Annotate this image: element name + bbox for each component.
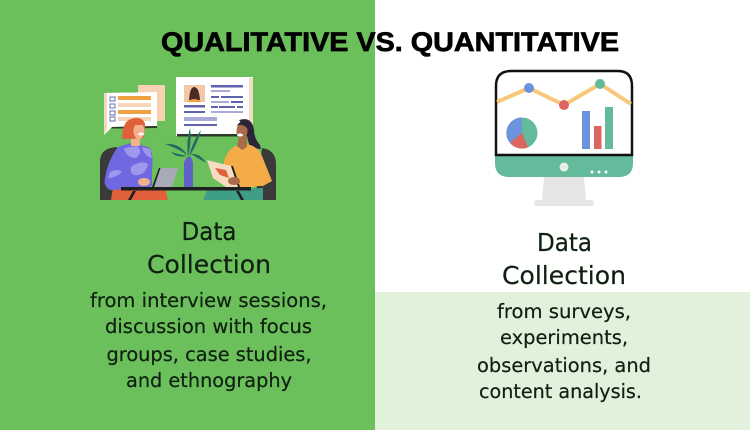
text block: quantitative description: experiments, — [500, 326, 628, 349]
icon: left woman — [105, 118, 168, 200]
icon: profile document — [176, 77, 253, 136]
heading: qualitative data collection — [147, 217, 271, 279]
heading: quantitative data collection — [502, 228, 626, 290]
heading: quantitative data collection: Data — [537, 228, 592, 257]
icon: table — [121, 187, 251, 200]
illustration: computer monitor with charts — [495, 71, 633, 206]
text block: quantitative description: observations, and — [477, 354, 651, 377]
icon: right chair — [255, 148, 276, 200]
icon: checklist speech bubble — [104, 85, 165, 135]
icon: left chair — [100, 147, 122, 200]
text block: qualitative description: from interview sessions, — [90, 289, 327, 312]
heading: qualitative data collection: Data — [182, 217, 236, 246]
icon: laptop — [152, 168, 178, 187]
icon: monitor stand — [534, 177, 594, 206]
panel: qualitative background — [0, 0, 375, 430]
text block: quantitative description — [477, 300, 651, 403]
text block: qualitative description: and ethnography — [126, 369, 292, 392]
text block: qualitative description: groups, case studies, — [106, 343, 312, 366]
illustration: two women in an interview — [100, 77, 276, 200]
heading: qualitative data collection: Collection — [147, 250, 271, 279]
title: QUALITATIVE VS. QUANTITATIVE — [161, 27, 619, 57]
line chart — [497, 79, 631, 110]
icon: monitor base — [495, 155, 633, 177]
icon: plant in vase — [165, 128, 206, 188]
icon: clipboard — [207, 160, 240, 187]
icon: right woman — [203, 119, 272, 200]
heading: quantitative data collection: Collection — [502, 261, 626, 290]
text block: qualitative description: discussion with focus — [105, 315, 312, 338]
panel: quantitative pale lower background — [375, 292, 750, 430]
text block: qualitative description — [90, 289, 327, 392]
bar chart — [582, 107, 613, 149]
text block: quantitative description: from surveys, — [497, 300, 631, 323]
text block: quantitative description: content analysis. — [479, 380, 642, 403]
icon: monitor screen — [496, 71, 632, 155]
pie chart — [506, 117, 538, 149]
